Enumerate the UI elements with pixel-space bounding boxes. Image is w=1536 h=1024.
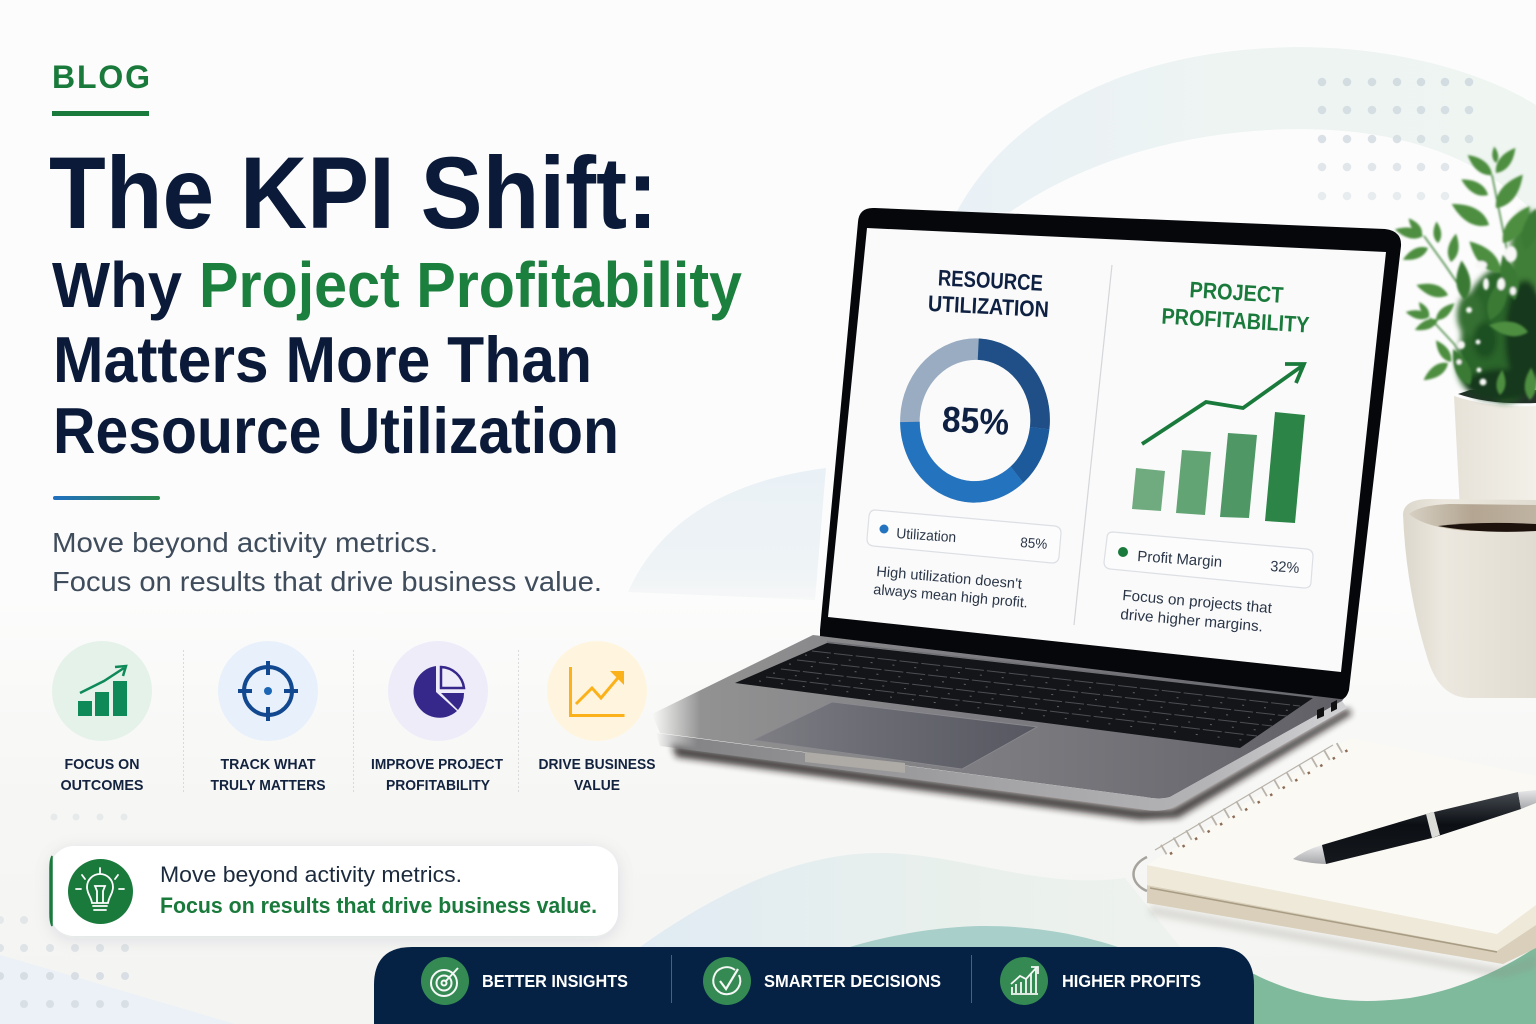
label: IMPROVE PROJECT	[371, 756, 503, 773]
notebook pages	[1147, 885, 1536, 964]
plant pot	[1454, 390, 1536, 510]
label	[371, 756, 503, 794]
subtitle: Move beyond activity metrics.	[52, 527, 438, 558]
icon: line graph	[547, 641, 647, 741]
donut chart	[906, 346, 1044, 495]
coffee cup	[1403, 499, 1536, 698]
notebook shadow	[1150, 905, 1536, 978]
subtitle	[52, 527, 602, 597]
feature: improve project profitability	[371, 641, 503, 794]
dot grid: bottom left	[0, 814, 129, 1008]
title: Matters More Than	[53, 323, 592, 396]
item: higher profits: HIGHER PROFITS	[1062, 971, 1201, 991]
utilization legend: Utilization	[896, 526, 957, 546]
title: Project Profitability	[199, 249, 742, 321]
panel heading: project profitability: PROJECT	[1189, 277, 1284, 308]
utilization legend: 85%	[1020, 534, 1048, 552]
icon: rising bars	[1000, 957, 1048, 1005]
icon: check circle	[703, 957, 751, 1005]
bottom bar	[374, 947, 1254, 1024]
feature: drive business value	[538, 641, 656, 794]
notebook ring	[1133, 857, 1147, 891]
laptop keyboard	[735, 642, 1313, 748]
title: Why	[52, 249, 182, 321]
plant foliage mass	[1456, 210, 1536, 403]
dotted dividers	[184, 650, 518, 793]
label: DRIVE BUSINESS	[538, 756, 656, 773]
item: better insights	[421, 957, 628, 1005]
panel heading: resource utilization: RESOURCE	[937, 265, 1043, 296]
item: better insights: BETTER INSIGHTS	[482, 971, 628, 991]
profit note: Focus on projects that	[1122, 587, 1273, 617]
utilization note: High utilization doesn't	[876, 564, 1022, 593]
trend arrow	[1142, 364, 1304, 444]
ports	[1317, 700, 1337, 719]
item: smarter decisions	[703, 957, 941, 1005]
screen divider	[1074, 265, 1112, 625]
laptop trackpad	[753, 702, 1037, 769]
plant leaves	[1394, 144, 1536, 400]
plant	[1394, 144, 1536, 403]
callout text: Move beyond activity metrics.	[160, 862, 462, 887]
utilization legend	[867, 510, 1061, 563]
label: TRACK WHAT	[220, 756, 316, 773]
icon: growth chart	[52, 641, 152, 741]
item: higher profits	[1000, 957, 1201, 1005]
panel heading: project profitability: PROFITABILITY	[1161, 304, 1310, 338]
screen panel: resource utilization	[867, 265, 1061, 611]
profit margin legend	[1104, 532, 1313, 588]
feature: focus on outcomes	[52, 641, 152, 794]
utilization note: always mean high profit.	[873, 582, 1028, 611]
subtitle: Focus on results that drive business value.	[52, 566, 602, 597]
laptop lid	[820, 208, 1401, 699]
label	[538, 756, 656, 794]
notebook cover	[1147, 738, 1536, 934]
pen	[1293, 790, 1536, 864]
notebook spiral	[1155, 745, 1348, 854]
laptop screen	[828, 228, 1386, 672]
label	[210, 756, 326, 794]
item: smarter decisions: SMARTER DECISIONS	[764, 971, 941, 991]
callout text	[160, 862, 597, 918]
icon: pie chart	[388, 641, 488, 741]
donut value: 85%	[941, 398, 1010, 443]
profit margin legend: 32%	[1270, 558, 1300, 577]
laptop shadow	[672, 708, 1352, 820]
title	[49, 136, 742, 467]
laptop base	[652, 635, 1347, 811]
feature: track what truly matters	[210, 641, 326, 794]
laptop	[652, 208, 1401, 820]
label	[60, 756, 144, 794]
callout	[50, 846, 618, 936]
label: PROFITABILITY	[386, 777, 490, 794]
profit note	[1120, 587, 1273, 635]
blog label	[52, 59, 150, 116]
utilization note	[873, 564, 1028, 611]
profit note: drive higher margins.	[1120, 606, 1264, 635]
icon: light bulb	[68, 859, 133, 924]
screen panel: project profitability	[1104, 277, 1313, 635]
label: TRULY MATTERS	[210, 777, 326, 794]
gaps between leaves	[1456, 246, 1517, 386]
blog label: BLOG	[52, 59, 150, 95]
icon row	[52, 641, 656, 794]
notebook	[1133, 738, 1536, 978]
label: OUTCOMES	[60, 777, 144, 794]
panel heading: project profitability	[1161, 277, 1310, 338]
panel heading: resource utilization	[927, 265, 1049, 322]
dot grid: top right	[1318, 78, 1473, 200]
title: The KPI Shift:	[49, 136, 658, 250]
bar chart	[1132, 412, 1305, 523]
icon: target	[218, 641, 318, 741]
title divider	[53, 496, 160, 500]
profit margin legend: Profit Margin	[1137, 548, 1223, 571]
panel heading: resource utilization: UTILIZATION	[927, 291, 1049, 322]
title: Resource Utilization	[53, 394, 619, 467]
icon: bullseye	[421, 957, 469, 1005]
callout text: Focus on results that drive business value.	[160, 893, 597, 918]
label: FOCUS ON	[64, 756, 140, 773]
label: VALUE	[574, 777, 620, 794]
